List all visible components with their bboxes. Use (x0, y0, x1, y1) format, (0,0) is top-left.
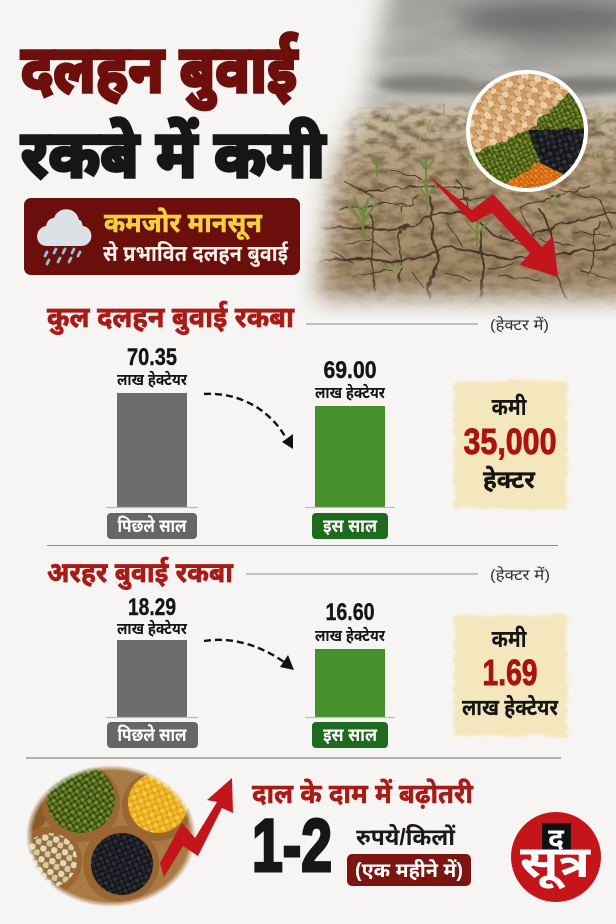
bar: last year: 70.35 (127, 344, 177, 371)
callout: decrease 35,000 hectare: हेक्टर (483, 465, 536, 494)
title: दलहन बुवाई (21, 32, 298, 110)
arrow: dashed change (204, 640, 294, 670)
bar: this year: लाख हेक्टेयर (315, 383, 386, 402)
arrow: red falling trend (428, 175, 558, 277)
bar: this year: 16.60 (326, 599, 374, 626)
bar: last year (106, 344, 198, 539)
logo: The Sootr (511, 812, 601, 902)
bar: last year: लाख हेक्टेयर (117, 370, 188, 389)
logo: The Sootr: द (548, 823, 565, 854)
bar: this year: 69.00 (324, 357, 376, 384)
callout: decrease 1.69 lakh hectare (454, 615, 567, 736)
panel: arhar sowing area (47, 556, 567, 748)
panel: total pulses sowing area (47, 301, 567, 539)
young crop seedlings (349, 104, 608, 278)
photo: bowls of pulses (26, 765, 196, 906)
title: रकबे में कमी (21, 117, 326, 191)
icon: rain cloud (37, 209, 91, 264)
callout: decrease 1.69 lakh hectare: 1.69 (482, 652, 538, 693)
unit note: (हेक्टर में) (490, 316, 549, 334)
bar: this year: इस साल (323, 725, 378, 745)
panel: pulse price rise (252, 778, 474, 887)
callout: decrease 35,000 hectare: 35,000 (464, 421, 556, 462)
panel: pulse price rise: 1-2 (252, 804, 332, 887)
bar: last year: पिछले साल (118, 725, 187, 745)
logo: The Sootr: सूत्र (520, 838, 592, 890)
banner: weak monsoon: से प्रभावित दलहन बुवाई (103, 241, 289, 267)
heading: कुल दलहन बुवाई रकबा (47, 301, 294, 335)
panel: pulse price rise: दाल के दाम में बढ़ोतरी (252, 778, 474, 809)
banner: weak monsoon: कमजोर मानसून (104, 208, 263, 240)
panel: pulse price rise: रुपये/किलों (356, 824, 456, 850)
bar: this year: इस साल (323, 516, 378, 536)
bar: last year: पिछले साल (118, 516, 187, 536)
icon: round mix of pulses (466, 70, 588, 192)
arrow: red rising trend (160, 778, 233, 877)
bar: last year (106, 594, 198, 748)
photo: cracked drought field under a cloudy sky (302, 0, 616, 317)
callout: decrease 1.69 lakh hectare: कमी (492, 625, 527, 653)
title (21, 32, 326, 191)
banner: weak monsoon (24, 198, 300, 275)
arrow: dashed change (204, 394, 293, 449)
bar: this year (305, 599, 395, 748)
soil cracks (320, 170, 616, 298)
bar: last year: 18.29 (128, 594, 176, 621)
panel: pulse price rise: (एक महीने में) (355, 858, 463, 882)
bar: this year: लाख हेक्टेयर (315, 626, 386, 645)
callout: decrease 35,000 hectare (454, 381, 567, 509)
unit note: (हेक्टर में) (490, 566, 550, 584)
callout: decrease 35,000 hectare: कमी (492, 393, 527, 421)
heading: अरहर बुवाई रकबा (47, 556, 234, 590)
callout: decrease 1.69 lakh hectare: लाख हेक्टेयर (462, 695, 559, 720)
bar: this year (305, 357, 395, 539)
bar: last year: लाख हेक्टेयर (117, 619, 188, 638)
